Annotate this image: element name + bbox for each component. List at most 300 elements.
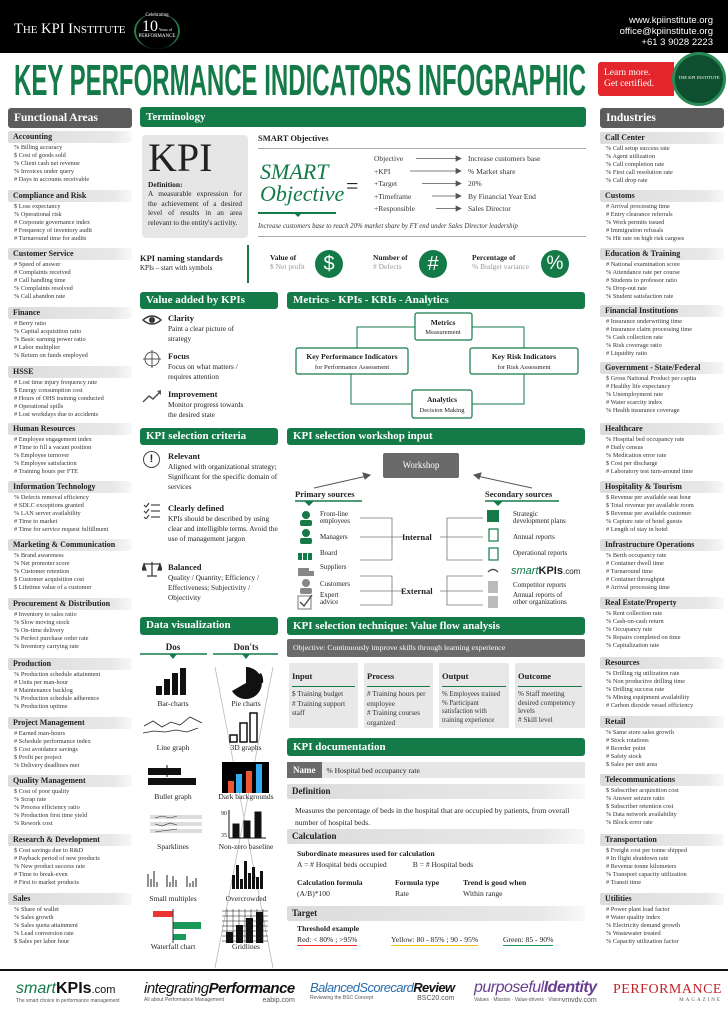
calculation [287,829,585,844]
panel: value flow analysis: % Employees trained [442,691,500,698]
panel: industries: % Call completion rate [606,161,664,168]
panel: functional areas: # First to market products [14,879,79,886]
SMART objective big text [260,159,344,206]
panel: industries: Government - State/Federal [605,363,701,372]
panel: value flow analysis [287,617,585,728]
sparklines [150,815,202,833]
panel: workshop input: Internal [402,532,432,542]
icon: hash [373,253,408,271]
contact info: +61 3 9028 2223 [641,37,713,48]
panel: value flow analysis: # Training hours per employee [367,690,426,708]
logo: integratingPerformance: All about Performance Management [144,997,224,1003]
panel: functional areas: Project Management [13,718,85,727]
KPI definition box: KPI [148,135,212,180]
panel: KPI documentation: Within range [463,889,503,898]
panel: data visualization: Overcrowded [226,894,267,903]
panel: functional areas: $ Profit per project [14,754,62,761]
panel: functional areas: # Speed of answer [14,261,60,268]
panel: industries: # Power plant load factor [606,906,670,913]
panel: KPI selection criteria: Clearly defined [168,503,224,513]
SMART objectives: By Financial Year End [468,192,536,200]
panel: functional areas: Production [13,659,51,668]
icon: exclamation [143,451,160,468]
panel: industries: % Student satisfaction rate [606,293,673,300]
panel: industries: % Answer seizure ratio [606,795,665,802]
panel: industries: # Healthy life expectancy [606,383,671,390]
panel: functional areas: # Complaints received [14,269,71,276]
contact info [620,15,713,48]
panel: functional areas: % Defects removal efficiency [14,494,89,501]
panel: data visualization: Sparklines [157,842,189,851]
panel: functional areas: # Inventory to sales ratio [14,611,77,618]
badge: celebrating 10 years [134,13,180,49]
badge: celebrating 10 years: Celebrating [145,13,169,18]
panel: functional areas: # Time for service request fulfillment [14,526,108,533]
panel: functional areas: % Client cash net revenue [14,160,80,167]
panel: value flow analysis: % Participant satisfaction with training experience [442,700,494,724]
panel: industries: % Call setup success rate [606,145,670,152]
panel: industries: # Safety stock [606,753,642,760]
panel: metrics diagram: Key Performance Indicators [306,352,398,361]
panel: functional areas: % Production schedule attainment [14,671,100,678]
panel: industries: % Hospital bed occupancy rate [606,436,684,443]
panel: metrics diagram: for Risk Assessment [497,364,551,371]
panel: workshop input: Competitor reports [513,581,566,589]
heading: industries: Industries [606,112,656,124]
panel: functional areas: % Process efficiency ratio [14,804,80,811]
panel: industries: % Drilling rig utilization rate [606,670,679,677]
header bar [0,0,728,53]
panel: industries: # Transit time [606,879,641,886]
panel: functional areas: # Corporate governance index [14,219,90,226]
panel: industries: % Mining equipment availability [606,694,689,701]
panel: industries: % Same store sales growth [606,729,674,736]
panel: functional areas: # Employee engagement index [14,436,92,443]
panel: industries: Resources [605,658,640,667]
logo: purposefulIdentity: purposefulIdentity [474,979,597,996]
logo: BalancedScorecardReview: BalancedScorecardReview [310,980,454,995]
panel: functional areas: % Sales quota attainment [14,922,78,929]
panel: industries [600,108,724,945]
panel: functional areas: Information Technology [13,482,95,491]
panel: KPI documentation: A = # Hospital beds occupied B = # Hospital beds [297,860,473,869]
SMART objectives: = [346,173,358,198]
panel: industries: % Cash collection rate [606,334,663,341]
badge: celebrating 10 years: 10 Years of [142,18,172,35]
logo: smartKPIs [16,980,120,1004]
icon: exclamation: ! [150,453,153,465]
panel: KPI documentation: Green: 85 - 90% [503,935,553,944]
logo: BalancedScorecardReview: Reviewing the BSC Concept [310,995,373,1001]
heading: industries [600,108,724,128]
panel: functional areas: % Rework cost [14,820,52,827]
panel: workshop input: Suppliers [320,563,347,571]
panel: KPI documentation: Formula type [395,878,439,887]
footer divider [0,969,728,971]
panel: functional areas: Human Resources [13,424,75,433]
panel: functional areas: # Operational spills [14,403,63,410]
panel: functional areas: Procurement & Distribution [13,599,110,608]
panel: KPI documentation: (A/B)*100 [297,889,330,898]
panel: workshop input: Customers [320,580,350,588]
panel: industries: $ Cost per discharge [606,460,657,467]
panel: metrics diagram [287,292,585,419]
panel: industries: # National examination score [606,261,680,268]
logo: The KPI Institute: THE KPI INSTITUTE [14,21,126,37]
panel: industries: $ Sales per unit area [606,761,657,768]
panel: functional areas: $ Sales per labor hour [14,938,69,945]
value flow boxes: Input [292,671,312,681]
logo: purposefulIdentity [474,979,598,1004]
logo: performance magazine: MAGAZINE [679,998,722,1003]
panel: functional areas: # Berry ratio [14,320,46,327]
panel: industries: # Students to professor ratio [606,277,677,284]
panel: industries: % Capacity utilization factor [606,938,679,945]
panel: value added by KPIs: Paint a clear picture of [168,324,234,333]
gridlines [222,909,268,943]
panel: workshop input: KPI selection workshop input [293,430,433,442]
panel: functional areas: % Production schedule adherence [14,695,99,702]
panel: workshop input: Strategic [513,510,538,518]
panel: functional areas: % Inventory carrying rate [14,643,79,650]
panel: functional areas: % Employee satisfaction [14,460,77,467]
panel: industries: # Daily census [606,444,643,451]
panel: data visualization: 90 [221,811,227,817]
panel: industries: Education & Training [605,249,680,258]
panel: industries: $ Subscriber acquisition cost [606,787,679,794]
heading: terminology [140,107,586,127]
panel: industries: # Immigration refusals [606,227,663,234]
panel: functional areas: % On-time delivery [14,627,64,634]
panel: industries: # In flight shutdown rate [606,855,668,862]
panel: data visualization: Dark backgrounds [218,792,274,801]
panel: workshop input: Secondary sources [485,489,553,499]
panel: functional areas: % Perfect purchase order rate [14,635,88,642]
small multiples [148,871,196,887]
panel: industries: # Container throughput [606,576,665,583]
workshop box: Workshop [403,460,439,470]
panel: industries: # Container dwell time [606,560,664,567]
KPI naming standards [140,245,569,283]
panel: industries: % First call resolution rate [606,169,673,176]
panel: functional areas: # Turnaround time for audits [14,235,86,242]
panel: functional areas: # Hours of OHS training conducted [14,395,104,402]
KPI naming standards: $ [323,253,335,275]
SMART components: Objective [374,154,403,163]
icon: dollar: $ Net profit [270,262,305,271]
panel: industries: # Length of stay in hotel [606,526,668,533]
panel: data visualization: Data visualization [146,619,231,631]
icon: hash: # Defects [373,262,402,271]
panel: industries: Hospitality & Tourism [605,482,682,491]
panel: industries: % Call drop rate [606,177,647,184]
panel: industries: % Capture rate of hotel guests [606,518,682,525]
panel: industries: # Reorder point [606,745,646,752]
panel: functional areas: % Production uptime [14,703,68,710]
panel: industries: $ Total revenue per available room [606,502,694,509]
panel: KPI documentation: Measures the percentage of beds in the hospital that are occupied by patients, from overall number of hospital beds. [295,806,569,827]
panel: value added by KPIs: Focus on what matters / [168,362,238,371]
name row: Name [293,765,316,775]
KPI naming standards: % [547,253,563,274]
panel: KPI documentation: Calculation formula [297,878,363,887]
panel: workshop input: External [401,586,433,596]
objective bar: Objective: Continuously improve skills through learning experience [293,643,505,652]
panel: industries: % Hit rate on high risk cargoes [606,235,684,242]
panel: industries: # Insurance underwriting time [606,318,682,325]
panel: data visualization: Small multiples [149,894,197,903]
contact info: office@kpiinstitute.org [620,26,713,37]
panel: industries: # Water quality index [606,914,660,921]
overcrowded [232,861,263,889]
panel: data visualization [140,617,278,968]
icon: percent: % Budget variance [472,262,529,271]
panel: KPI selection criteria: KPIs should be described by using clear and intelligible terms. Avoid the use of management jargon [168,514,278,543]
panel: data visualization: Don'ts [233,642,259,652]
panel: industries: Transportation [605,835,657,844]
panel: industries: # Revenue tonne kilometers [606,863,676,870]
workshop box [383,453,459,478]
SMART components: +Timeframe [374,192,411,200]
panel: functional areas: $ Energy consumption cost [14,387,83,394]
SMART objectives: Sales Director [468,204,511,213]
panel: workshop input: employees [320,517,350,525]
icon: checklist [144,502,160,519]
panel: functional areas: Quality Management [13,776,86,785]
panel: functional areas: % Operational risk [14,211,62,218]
panel: industries: Infrastructure Operations [605,540,694,549]
icon: hash: Number of [373,253,408,262]
panel: workshop input: Primary sources [295,489,355,499]
icon: scale [142,562,162,577]
panel: industries: % Occupancy rate [606,626,652,633]
panel: functional areas: # Time to fill a vacant position [14,444,91,451]
panel: value added by KPIs: Value added by KPIs [146,294,245,306]
panel: industries: Call Center [605,133,645,142]
panel: value added by KPIs: Monitor progress towards [168,400,243,409]
name row [287,762,585,778]
panel: functional areas: # Units per man-hour [14,679,68,686]
panel: industries: # Turnaround time [606,568,653,575]
pie chart [232,667,262,699]
panel: KPI documentation: Trend is good when [463,878,526,887]
button: learn more: Get certified. [604,79,654,89]
SMART objective big text: Objective [260,181,344,206]
panel: data visualization: 3D graphs [230,743,262,752]
panel: industries: % Health insurance coverage [606,407,680,414]
panel: industries: Telecommunications [605,775,675,784]
panel: KPI selection criteria: Relevant [168,451,200,461]
panel: industries: Customs [605,191,635,200]
panel: KPI selection criteria: Balanced [168,562,202,572]
panel: industries: # Entry clearance referrals [606,211,673,218]
panel: workshop input: Front-line [320,510,348,518]
logo: integratingPerformance: integratingPerformance [144,980,295,997]
panel: functional areas: % Lead conversion rate [14,930,74,937]
panel: workshop input: smartKPIs.com [511,565,581,577]
panel: industries: % Rent collection rate [606,610,662,617]
contact info: www.kpiinstitute.org [629,15,713,26]
panel: functional areas: # Days in accounts receivable [14,176,89,183]
panel: workshop input: other organizations [513,598,567,606]
SMART objectives: Increase customers base to reach 20% market share by FY end under Sales Director leadership [258,223,518,230]
panel: functional areas: $ Lifetime value of a customer [14,584,91,591]
panel: data visualization: Bullet graph [154,792,192,801]
panel: KPI documentation: Red: < 80% ; >95% [297,935,357,944]
panel: functional areas: % Invoices under query [14,168,74,175]
panel: industries: % Drop-out rate [606,285,647,292]
panel: functional areas: $ Cost of poor quality [14,788,69,795]
panel: value flow analysis: Outcome [518,671,551,681]
panel: industries: Financial Institutions [605,306,678,315]
panel: functional areas: # Schedule performance index [14,738,91,745]
KPI definition box [142,135,248,238]
panel: value flow analysis: # Skill level [518,716,553,724]
panel: functional areas: % Return on funds employed [14,352,88,359]
KPI naming standards: KPI naming standards [140,253,223,263]
panel: industries: % Electricity demand growth [606,922,680,929]
panel: industries: # Arrival processing time [606,584,670,591]
SMART objectives: 20% [468,179,482,188]
panel: KPI documentation: Threshold example [297,924,359,933]
panel: functional areas: % New product success rate [14,863,85,870]
panel: KPI documentation: Yellow: 80 - 85% ; 90 - 95% [391,935,478,944]
panel: data visualization: Bar-charts [157,699,189,708]
panel: functional areas: Sales [13,894,30,903]
panel: functional areas: % Share of wallet [14,906,59,913]
panel: industries: % Agent utilization [606,153,655,160]
icon: dollar [270,253,305,271]
panel: functional areas: # Lost workdays due to accidents [14,411,98,418]
logo: smartKPIs: smartKPIs.com [16,980,115,997]
icon: dollar: Value of [270,253,296,262]
panel: industries: % Berth occupancy rate [606,552,666,559]
panel: metrics diagram: for Performance Assessment [315,364,389,371]
KPI definition box: A measurable expression for the achievement of a desired level of results in an area relevant to the entity's activity. [148,189,242,227]
panel: metrics diagram: Metrics - KPIs - KRIs - Analytics [293,294,449,306]
definition [287,784,585,799]
panel: value added by KPIs [140,292,278,419]
panel: industries: $ Gross National Product per capita [606,375,696,382]
KPI naming standards: KPIs – start with symbols [140,264,212,272]
objective bar [287,639,585,657]
panel: industries: % Wastewater treated [606,930,661,937]
panel: data visualization: Pie charts [231,699,261,708]
heading: functional areas [8,108,132,128]
panel: data visualization: 35 [221,833,227,839]
SMART components: +KPI [374,166,390,176]
value flow boxes: $ Training budget [292,690,343,698]
badge: certified: THE KPI INSTITUTE [678,75,720,80]
SMART objectives: Increase customers base [468,154,540,163]
panel: industries: % Attendance rate per course [606,269,680,276]
panel: industries: # Laboratory test turn-around time [606,468,693,475]
non-zero baseline [229,810,266,838]
panel: industries: Retail [605,717,625,726]
panel: KPI documentation [287,738,585,946]
panel: KPI selection criteria: Quality / Quantity; Efficiency / Effectiveness; Subjectivity / Objectivity [168,573,259,602]
bullet graph [148,768,181,775]
panel: industries: % Capitalization rate [606,642,659,649]
badge: certified [672,52,726,106]
panel: workshop input: Expert [320,591,339,599]
panel: value flow analysis: % Staff meeting desired competency levels [518,690,575,715]
logo: purposefulIdentity: vmvdv.com [562,997,597,1004]
panel: workshop input [287,428,585,610]
panel: functional areas: % Billing accuracy [14,144,62,151]
panel: value flow analysis: KPI selection technique: Value flow analysis [293,620,500,632]
name row: % Hospital bed occupancy rate [326,766,420,775]
panel: functional areas: % Customer retention [14,568,69,575]
value flow boxes: # Training support staff [292,700,345,717]
panel: metrics diagram: Key Risk Indicators [492,352,556,361]
panel: functional areas: # Earned man-hours [14,730,65,737]
heading: terminology: Terminology [146,111,206,123]
panel: workshop input: Board [320,549,338,557]
waterfall [153,911,173,917]
panel: functional areas: Compliance and Risk [13,191,86,200]
panel: industries: # Liquidity ratio [606,350,647,357]
panel: functional areas: $ Cost avoidance savings [14,746,78,753]
panel: functional areas: $ Cost of goods sold [14,152,66,159]
panel: industries: $ Subscriber retention cost [606,803,673,810]
SMART components: +Responsible [374,204,415,213]
panel: functional areas: % Scrap rate [14,796,46,803]
panel: KPI selection criteria: KPI selection criteria [146,430,246,442]
logo: integratingPerformance: eabip.com [262,997,295,1004]
panel: value added by KPIs: the desired state [168,410,215,419]
panel: KPI documentation: Subordinate measures used for calculation [297,849,435,858]
panel: value added by KPIs: requires attention [168,372,219,381]
SMART components [374,154,415,213]
panel: functional areas: # Call handling time [14,277,66,284]
panel: workshop input: Managers [320,533,348,541]
panel: data visualization: Non-zero baseline [219,842,274,851]
panel: industries: % Block error rate [606,819,653,826]
panel: industries: % Work permits issued [606,219,664,226]
panel: functional areas: # Training hours per FTE [14,468,78,475]
panel: functional areas: $ Loss expectancy [14,203,61,210]
SMART objectives: SMART Objectives [258,133,329,143]
panel: functional areas: % Capital acquisition ratio [14,328,81,335]
logo: purposefulIdentity: Values · Mission · Value-drivers · Vision [474,997,562,1003]
panel: industries: # Water scarcity index [606,399,662,406]
panel: functional areas: Marketing & Communication [13,540,115,549]
panel: functional areas: % Employee turnover [14,452,69,459]
panel: data visualization: Gridlines [232,942,260,951]
panel: data visualization: Waterfall chart [151,942,196,951]
panel: functional areas: # Time to market [14,518,57,525]
panel: functional areas: $ Cost savings due to R&D [14,847,83,854]
panel: functional areas: Accounting [13,132,52,141]
panel: industries: % Repairs completed on time [606,634,680,641]
3d graph [230,713,257,742]
icon: crosshair [143,350,161,368]
panel: functional areas: $ Customer acquisition cost [14,576,84,583]
panel: terminology [140,107,586,283]
panel: metrics diagram: Metrics [431,318,455,327]
footer logos [16,979,722,1004]
panel: functional areas: % Production first time yield [14,812,87,819]
panel: industries: % Data network availability [606,811,677,818]
panel: value flow analysis: Process [367,671,394,681]
bar chart [156,668,186,695]
panel: industries: # Carbon dioxide vessel efficiency [606,702,693,709]
KPI naming standards: # [427,253,439,275]
value flow boxes [289,663,358,728]
panel: functional areas: Research & Development [13,835,100,844]
calculation: Calculation [292,831,337,841]
